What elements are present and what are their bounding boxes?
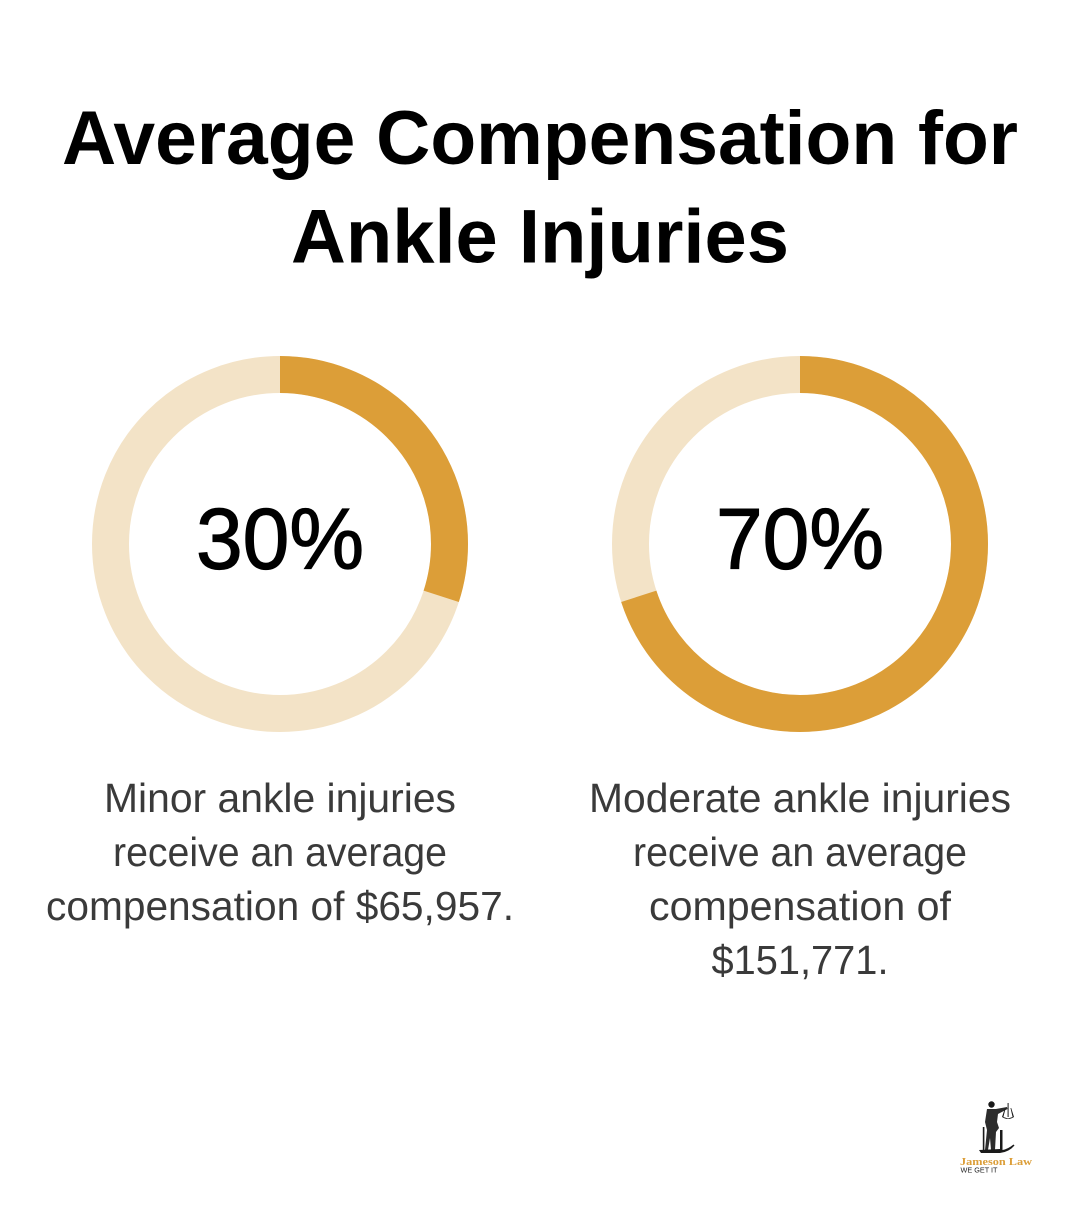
logo: Jameson Law: Jameson Law (960, 1156, 1032, 1168)
title: Average Compensation for (62, 96, 1018, 181)
title: Ankle Injuries (291, 194, 789, 280)
donut chart: 70% (630, 374, 970, 714)
title (62, 96, 1018, 280)
panel: minor ankle injuries (46, 374, 514, 929)
text: moderate injury description (589, 775, 1011, 983)
text: moderate injury description: compensation of (649, 883, 952, 929)
icon: lady justice (979, 1101, 1014, 1153)
text: minor injury description: receive an average (113, 829, 447, 875)
panel: moderate ankle injuries (589, 374, 1011, 983)
donut chart: 30%: 30% (196, 492, 364, 588)
text: minor injury description: compensation of $65,957. (46, 883, 514, 929)
logo: Jameson Law: WE GET IT (960, 1166, 998, 1174)
text: moderate injury description: $151,771. (712, 937, 888, 983)
donut chart: 70%: 70% (716, 492, 884, 588)
logo: Jameson Law (960, 1101, 1032, 1174)
text: minor injury description: Minor ankle injuries (104, 775, 456, 821)
text: moderate injury description: receive an average (633, 829, 967, 875)
text: moderate injury description: Moderate ankle injuries (589, 775, 1011, 821)
donut chart: 30% (110, 374, 450, 714)
text: minor injury description (46, 775, 514, 929)
